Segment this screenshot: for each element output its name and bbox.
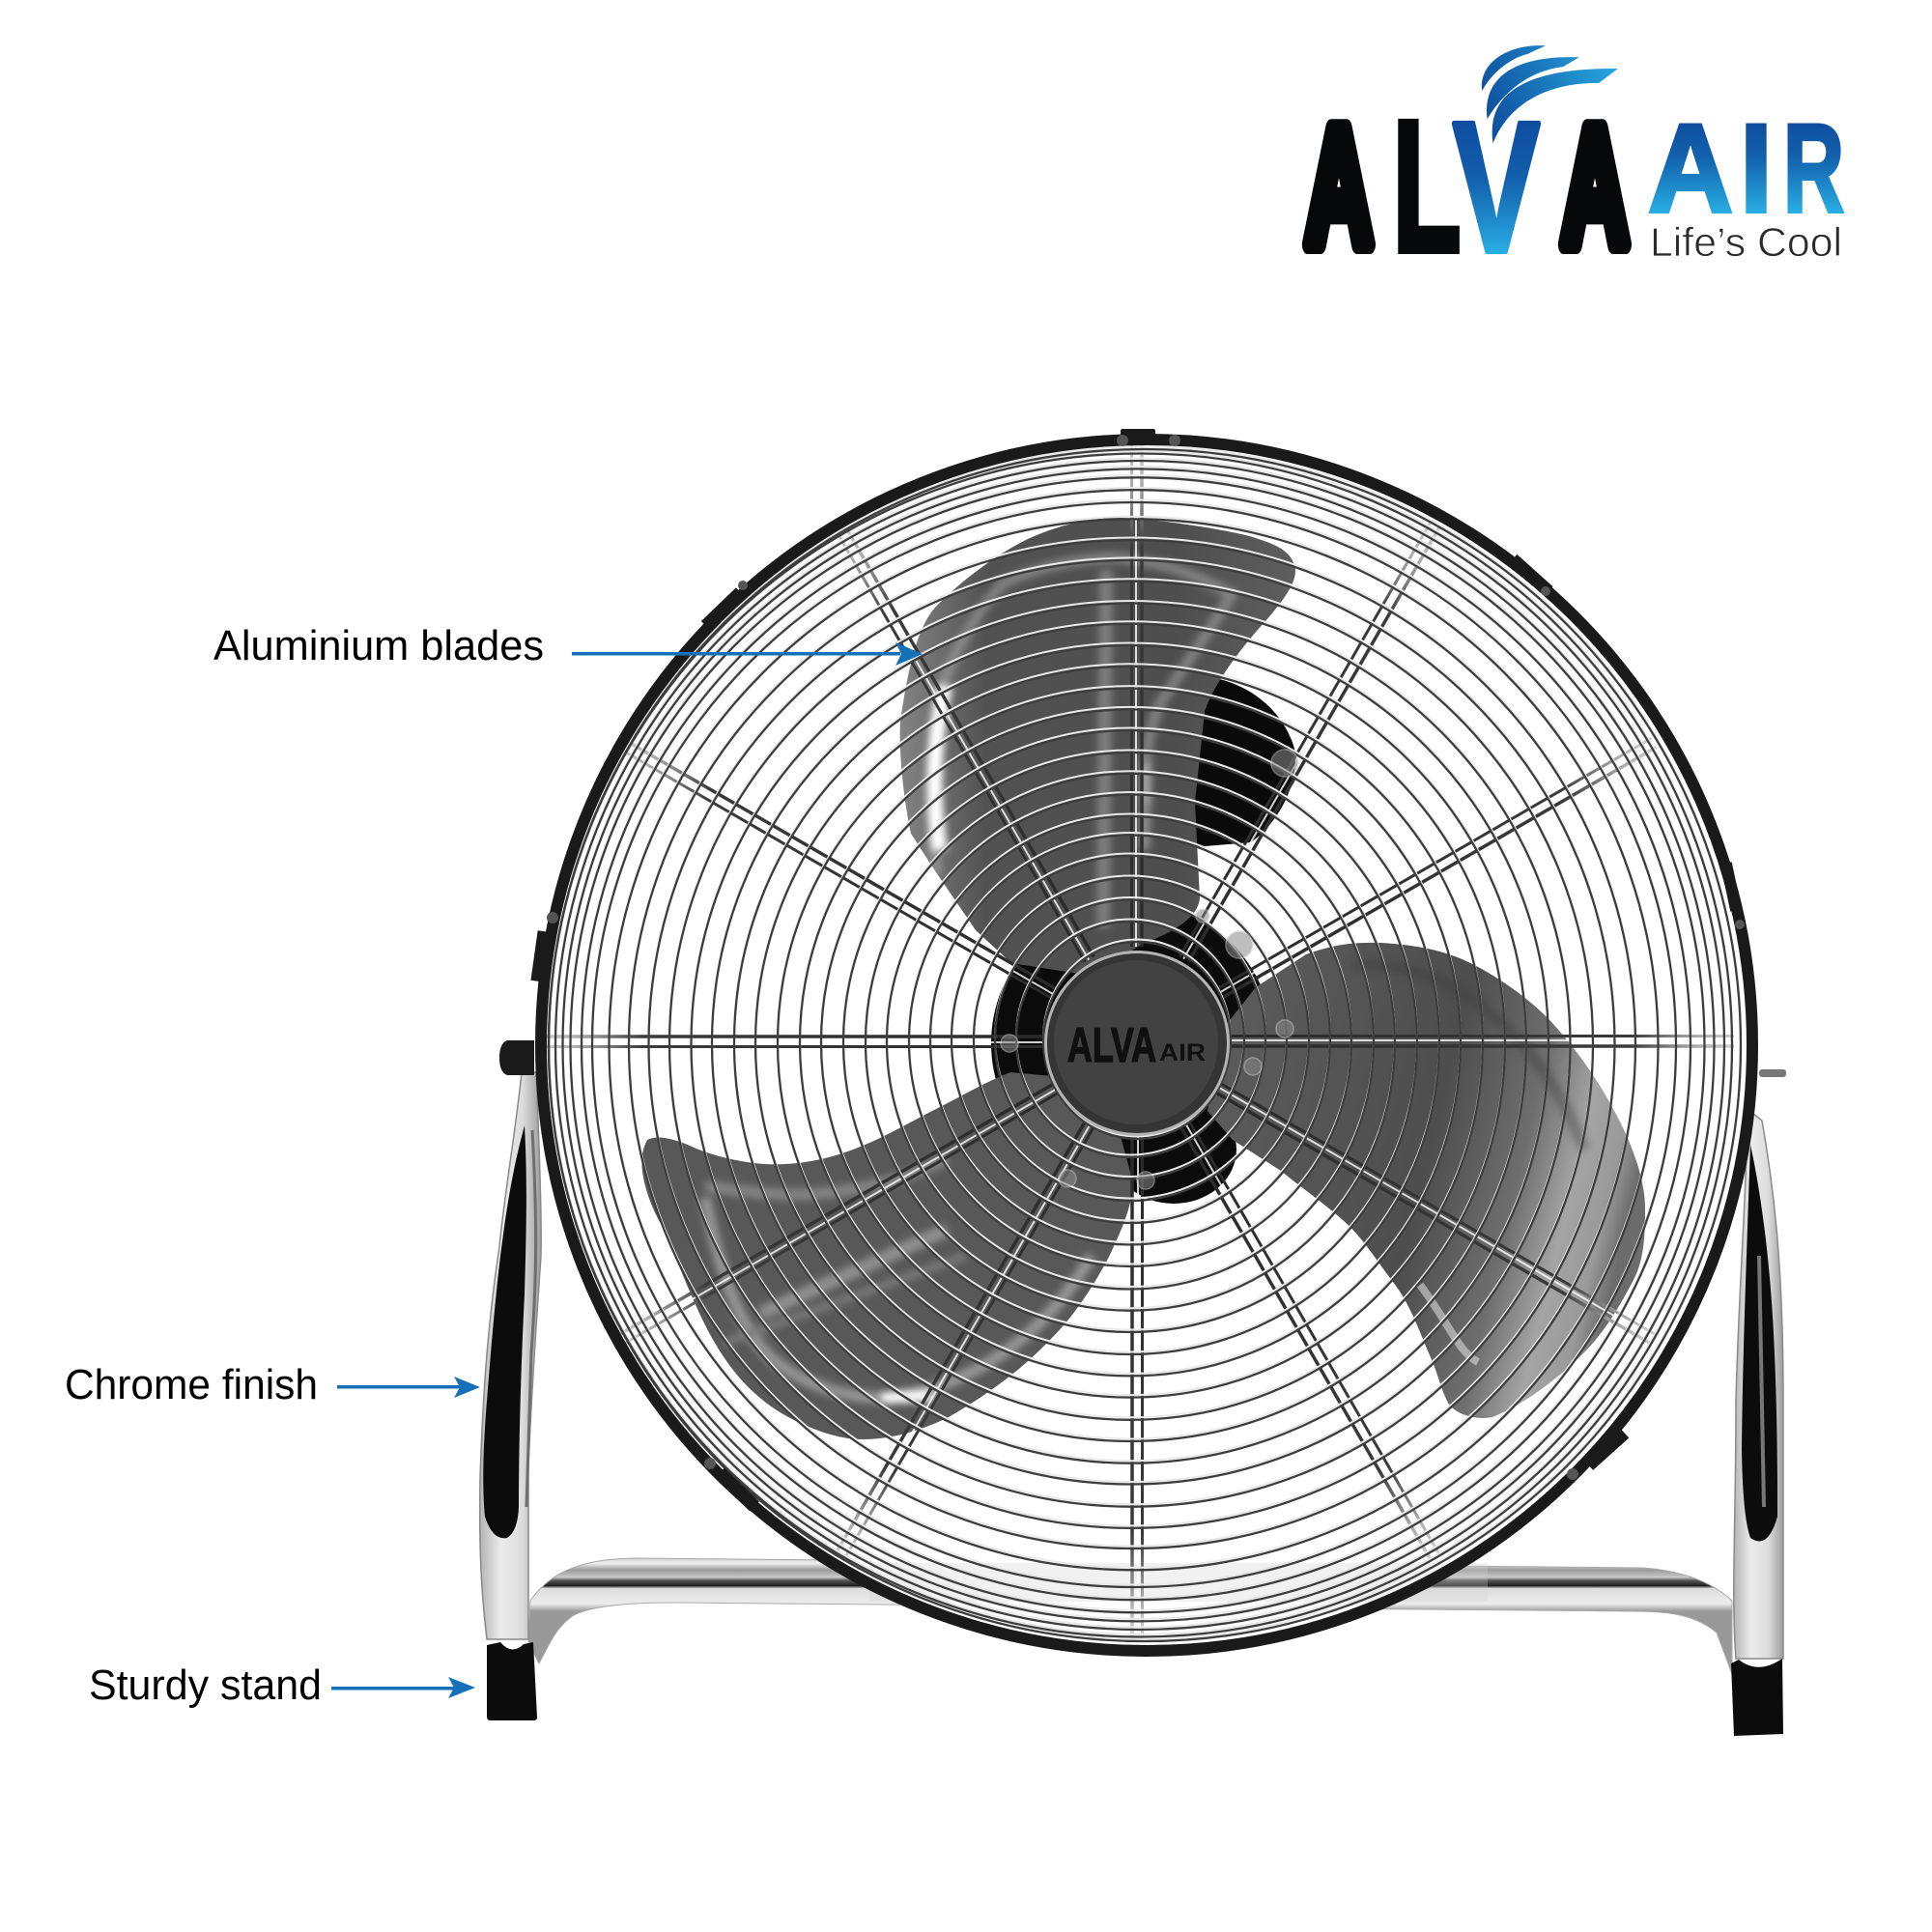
blade highlights bbox=[705, 1159, 1092, 1398]
logo: wind feathers bbox=[1482, 45, 1618, 143]
right leg black reflection bbox=[1742, 1145, 1777, 1542]
blade body bbox=[641, 1072, 1133, 1439]
right leg chrome stripe bbox=[1759, 1256, 1764, 1507]
hub face bbox=[1047, 953, 1227, 1133]
fan stand bbox=[480, 1040, 1786, 1736]
blade: top bbox=[900, 518, 1295, 976]
stand: right leg bbox=[1734, 1109, 1783, 1659]
base bar seen through grill bbox=[869, 1563, 1488, 1602]
hub rim bbox=[1044, 951, 1230, 1136]
blade shadow arc bbox=[1352, 965, 1584, 1150]
left leg chrome lines bbox=[526, 1130, 536, 1507]
logo wordmark: AIR: I bbox=[1740, 98, 1773, 239]
arrow: Sturdy stand bbox=[331, 1677, 475, 1698]
left leg black reflection bbox=[483, 1125, 526, 1538]
foot: left bbox=[487, 1642, 537, 1720]
arrow: Aluminium blades bbox=[572, 642, 923, 666]
blade: right bbox=[1208, 943, 1645, 1418]
logo tagline: Life’s Cool bbox=[1650, 219, 1842, 265]
motor housing bbox=[1159, 679, 1295, 850]
stand: base bar bbox=[528, 1558, 1732, 1674]
logo wordmark: AIR: A bbox=[1648, 98, 1733, 239]
grill rings bbox=[549, 446, 1741, 1641]
logo: Alva Air bbox=[1305, 45, 1844, 291]
logo wordmark: ALVA: A bbox=[1561, 92, 1629, 280]
logo wordmark: AIR bbox=[1648, 98, 1844, 239]
logo wordmark: ALVA: V bbox=[1453, 83, 1540, 291]
rim brackets bbox=[530, 429, 1745, 1511]
motor centre bbox=[991, 902, 1273, 1184]
stand: left leg bbox=[480, 1072, 541, 1639]
blade rivets bbox=[1001, 750, 1298, 1189]
motor lower part bbox=[1111, 1095, 1236, 1204]
blade body bbox=[900, 518, 1295, 976]
hub logo: ALVA: ALVA bbox=[1067, 1018, 1156, 1072]
fan head bbox=[530, 429, 1752, 1651]
label: Chrome finish: Chrome finish bbox=[65, 1361, 318, 1408]
arrow: Chrome finish bbox=[337, 1377, 480, 1398]
blade: lower left bbox=[641, 1072, 1133, 1439]
left leg chrome body bbox=[480, 1072, 541, 1639]
foot: right bbox=[1731, 1659, 1783, 1736]
blade body bbox=[1208, 943, 1645, 1418]
pivot knob: left bbox=[499, 1040, 534, 1075]
pivot bolt: right bbox=[1759, 1069, 1786, 1077]
label: Sturdy stand: Sturdy stand bbox=[89, 1662, 322, 1709]
outer black rim bbox=[541, 440, 1752, 1651]
label: Aluminium blades: Aluminium blades bbox=[213, 622, 544, 669]
logo wordmark: ALVA: L bbox=[1393, 82, 1461, 290]
blade highlights bbox=[932, 557, 1232, 927]
logo wordmark: ALVA bbox=[1305, 82, 1629, 291]
hub inner disc bbox=[1054, 960, 1218, 1124]
blade lower highlight bbox=[1420, 1285, 1478, 1362]
right leg chrome body bbox=[1734, 1109, 1783, 1659]
grill spokes bbox=[540, 444, 1734, 1638]
logo wordmark: AIR: R bbox=[1783, 98, 1844, 239]
fan interior bbox=[542, 440, 1751, 1650]
hub logo: AIR: AIR bbox=[1159, 1039, 1206, 1066]
hub bbox=[1044, 951, 1230, 1136]
logo wordmark: ALVA: A bbox=[1305, 92, 1373, 280]
